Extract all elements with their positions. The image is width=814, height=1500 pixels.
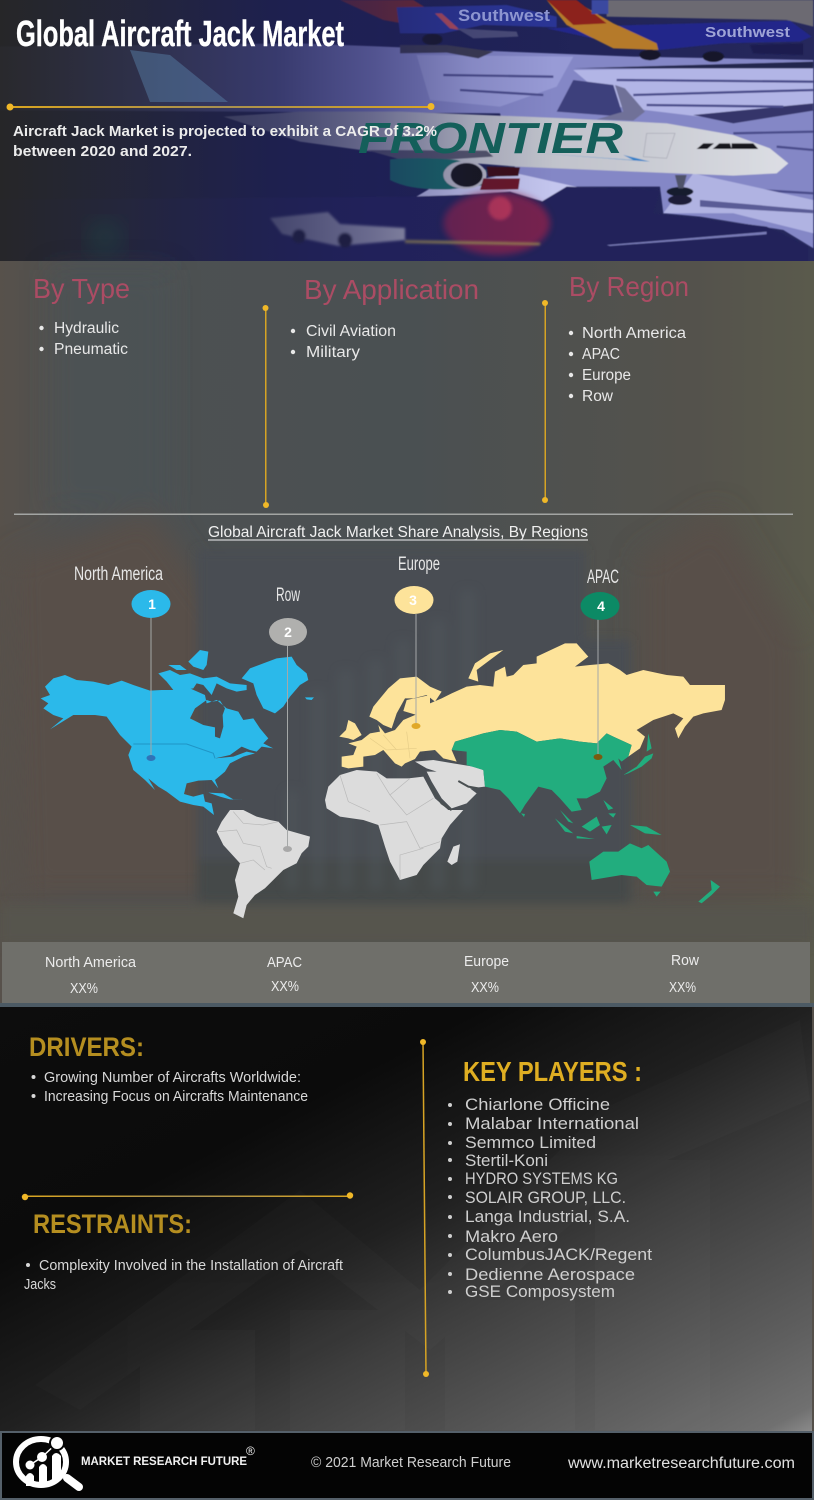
panel: hero photo banner: Southwest	[458, 6, 550, 25]
map pin: Europe	[394, 554, 440, 729]
map region: APAC	[452, 730, 720, 903]
panel: regional share table: Europe	[464, 954, 509, 970]
text block: CAGR statement: between 2020 and 2027.	[13, 143, 192, 160]
panel: by application: By Application	[304, 274, 479, 305]
panel: key players: Langa Industrial, S.A.	[465, 1207, 630, 1226]
panel: regional share table: XX%	[471, 980, 499, 996]
map pin: APAC	[580, 567, 620, 760]
panel: key players: SOLAIR GROUP, LLC.	[465, 1188, 626, 1207]
main airplane	[223, 112, 788, 176]
panel: by region: North America	[582, 325, 686, 342]
footer bar: MARKET RESEARCH FUTURE	[81, 1456, 247, 1468]
panel: regional share table: XX%	[669, 980, 696, 996]
tug vehicle	[270, 212, 540, 248]
panel: key players: Stertil-Koni	[465, 1151, 548, 1170]
panel: by type: By Type	[33, 273, 130, 304]
map pin: North America	[74, 564, 170, 761]
panel: restraints: RESTRAINTS:	[33, 1209, 192, 1239]
panel: hero photo banner	[0, 0, 814, 263]
map pin: Europe: 3	[409, 592, 417, 608]
panel: key players	[448, 1056, 652, 1301]
panel: key players: Chiarlone Officine	[465, 1095, 610, 1114]
panel: drivers, restraints, key players background	[0, 1007, 812, 1431]
panel: key players: HYDRO SYSTEMS KG	[465, 1169, 618, 1188]
map pin: North America: 1	[148, 596, 156, 612]
divider above restraints	[22, 1192, 353, 1200]
world map	[41, 643, 725, 918]
heading: map section: Global Aircraft Jack Market Share Analysis, By Regions	[208, 524, 588, 541]
panel: key players: KEY PLAYERS :	[463, 1056, 642, 1087]
panel: hero photo banner: FRONTIER	[358, 114, 623, 163]
icon: company logo	[16, 1436, 79, 1487]
map pin: APAC: 4	[597, 598, 605, 614]
divider line with dots	[6, 103, 434, 110]
vertical divider left	[262, 305, 269, 508]
panel: by application: Military	[306, 344, 360, 361]
panel: by region: By Region	[569, 271, 689, 302]
panel: drivers	[29, 1032, 308, 1105]
panel: by region: APAC	[582, 346, 620, 363]
text block: CAGR statement: Aircraft Jack Market is projected to exhibit a CAGR of 3.2%	[13, 123, 437, 140]
panel: by region: Row	[582, 388, 614, 405]
panel: restraints	[24, 1209, 344, 1293]
panel: key players: GSE Composystem	[465, 1282, 615, 1301]
text block: CAGR statement	[13, 123, 437, 160]
panel: by type: Hydraulic	[54, 320, 119, 337]
panel: segments and map background	[0, 261, 814, 1006]
panel: key players: Malabar International	[465, 1114, 639, 1133]
map region: Africa and Middle East	[325, 760, 485, 880]
footer bar: © 2021 Market Research Future	[311, 1454, 511, 1471]
panel: key players: Makro Aero	[465, 1227, 558, 1246]
map region: North America	[41, 650, 314, 815]
panel: key players: ColumbusJACK/Regent	[465, 1245, 652, 1264]
background airplanes	[340, 0, 440, 28]
panel: by region	[569, 271, 689, 405]
panel: by type: Pneumatic	[54, 341, 128, 358]
map pin: North America: North America	[74, 564, 163, 585]
map pin: Row: Row	[276, 585, 300, 606]
panel: regional share table: XX%	[271, 979, 299, 995]
panel: by application: Civil Aviation	[306, 323, 396, 340]
panel: regional share table: Row	[671, 953, 700, 969]
panel: drivers: Growing Number of Aircrafts Worldwide:	[44, 1069, 301, 1086]
panel: drivers: Increasing Focus on Aircrafts Maintenance	[44, 1088, 308, 1105]
map pin: Row: 2	[284, 624, 292, 640]
horizontal divider	[14, 514, 793, 515]
map pin: APAC: APAC	[587, 567, 619, 588]
title: Global Aircraft Jack Market	[16, 13, 344, 54]
panel: regional share table: APAC	[267, 955, 302, 971]
panel: by type	[33, 273, 130, 358]
panel: by application	[291, 274, 479, 361]
panel: by region: Europe	[582, 367, 631, 384]
panel: key players: Semmco Limited	[465, 1133, 596, 1152]
panel: key players: Dedienne Aerospace	[465, 1265, 635, 1284]
panel: regional share table	[0, 942, 814, 1007]
panel: restraints: Complexity Involved in the Installation of Aircraft	[39, 1257, 344, 1274]
footer bar: ®	[246, 1444, 255, 1458]
map region: Europe and Russia	[339, 643, 725, 768]
panel: drivers: DRIVERS:	[29, 1032, 144, 1062]
vertical divider beside key players	[420, 1039, 429, 1377]
map pin: Europe: Europe	[398, 554, 440, 575]
footer bar	[0, 1431, 814, 1500]
panel: regional share table: XX%	[70, 981, 98, 997]
map region: South America	[217, 810, 310, 918]
vertical divider right	[542, 300, 548, 503]
panel: hero photo banner: Southwest	[705, 24, 790, 41]
map pin: Row	[269, 585, 307, 852]
footer bar: www.marketresearchfuture.com	[567, 1455, 795, 1472]
panel: regional share table: North America	[45, 955, 137, 971]
panel: restraints: Jacks	[24, 1276, 56, 1293]
